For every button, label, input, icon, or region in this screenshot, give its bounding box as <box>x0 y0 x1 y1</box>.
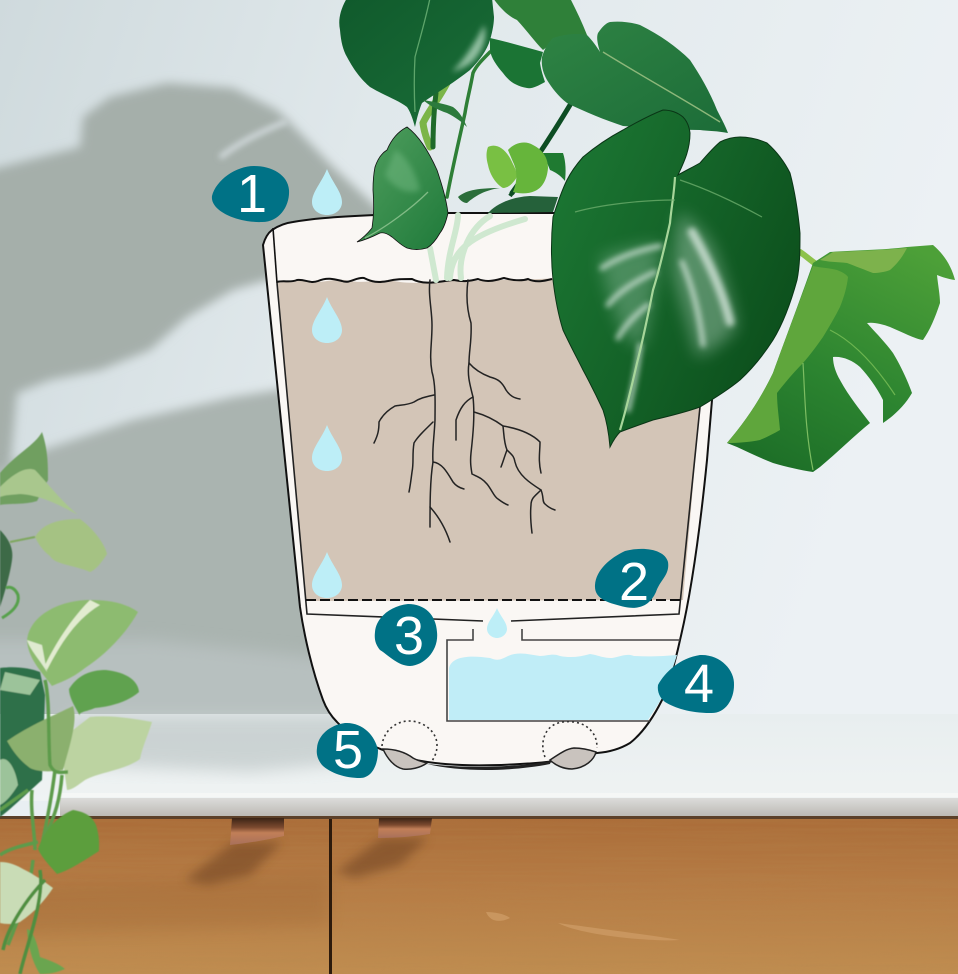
wick chamber arc right <box>543 722 597 757</box>
leaf: top right large <box>542 22 728 133</box>
water drop 1 <box>312 169 342 215</box>
pothos leaf 7 <box>38 810 99 874</box>
soil <box>277 278 700 601</box>
glossy sheen right of midrib <box>673 213 737 357</box>
stems of main plant <box>423 52 816 264</box>
leaf: small behind <box>490 38 545 88</box>
leaf: big central monstera <box>552 110 800 447</box>
soil surface line <box>277 278 552 283</box>
pothos dark inner foliage <box>0 667 45 817</box>
shelf front edge <box>60 798 958 818</box>
pothos plant left <box>0 432 152 974</box>
wooden cabinet doors <box>0 819 958 974</box>
leaf: small light green right <box>508 143 548 193</box>
inner pot wall <box>277 283 700 621</box>
water drop 5 <box>487 608 507 638</box>
small stem dark <box>510 193 512 196</box>
callout 3 <box>375 604 437 666</box>
pothos leaf 2 <box>35 519 107 572</box>
pot foot left <box>383 749 427 769</box>
callout 3: 3 <box>394 606 424 666</box>
water drop 2 <box>312 297 342 343</box>
leaf: small over rim <box>357 127 448 250</box>
pothos leaf cluster top <box>0 432 78 515</box>
leaf: narrow behind rim <box>458 188 500 203</box>
glossy sheen left of midrib <box>600 243 660 347</box>
leaf: right monstera <box>727 245 955 472</box>
pothos leaf 9 <box>27 929 65 974</box>
pothos stems <box>0 680 68 945</box>
wall background <box>0 0 958 730</box>
leaf: top centre <box>493 0 587 50</box>
door handle right <box>336 818 432 878</box>
callout 1 <box>212 164 289 224</box>
door handle left <box>185 818 284 885</box>
wall shadow of plants <box>0 83 385 735</box>
water reservoir <box>447 629 680 721</box>
pothos leaf 5 variegated <box>60 716 152 790</box>
mesh dashed line <box>306 599 680 601</box>
callout 5 <box>317 720 378 780</box>
leaf: small dark behind <box>543 153 566 181</box>
pot base contact shadow <box>427 761 551 770</box>
callout 2 <box>595 549 668 612</box>
shelf top surface <box>0 714 958 801</box>
pothos leaf 8 <box>0 862 53 924</box>
callout 2: 2 <box>619 552 649 612</box>
callout 4: 4 <box>684 654 714 714</box>
pale stems above soil <box>430 215 525 280</box>
leaf: behind pot rim <box>488 196 558 213</box>
pothos leaf 4 <box>69 670 139 716</box>
planter body <box>263 213 712 765</box>
leaf: top left dark <box>339 0 494 127</box>
water drop 3 <box>312 425 342 471</box>
wick chamber arc left <box>382 721 437 761</box>
water drop 4 <box>312 552 342 598</box>
fold: top of monstera <box>820 248 907 273</box>
leaf: narrow near stem <box>423 100 467 127</box>
glossy streaks <box>602 232 730 410</box>
pothos dark leaf edge <box>0 530 12 607</box>
roots <box>374 280 555 542</box>
pot foot right <box>550 748 596 769</box>
callout 5: 5 <box>333 720 363 780</box>
pothos leaf 3 large <box>27 600 138 686</box>
callout 4 <box>658 654 734 714</box>
leaf: small light green left <box>486 146 517 188</box>
callout 1: 1 <box>237 164 267 224</box>
fold: front of monstera <box>727 266 848 443</box>
pothos leaf 6 <box>7 706 75 771</box>
